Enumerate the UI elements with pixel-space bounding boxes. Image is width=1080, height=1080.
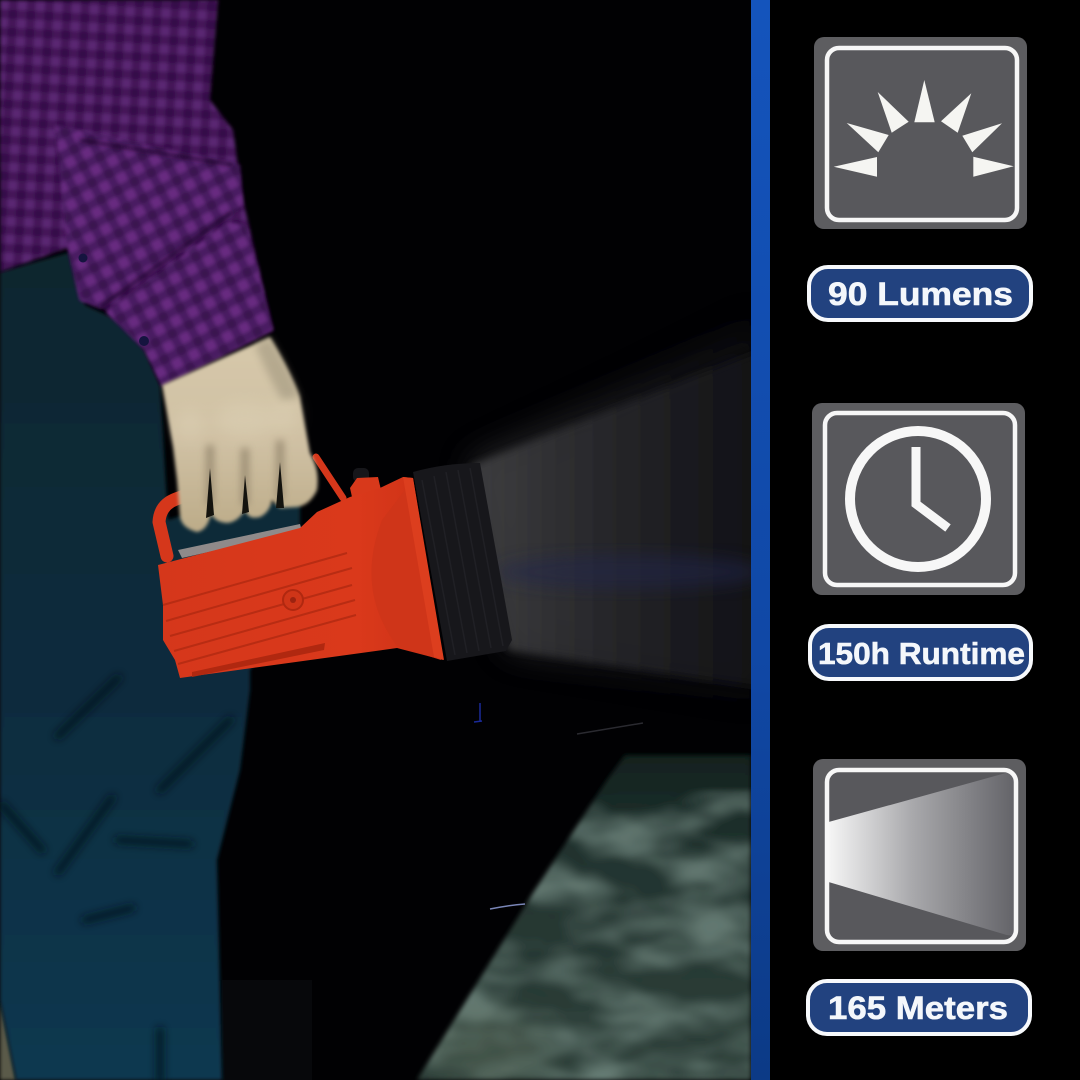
lens ring (413, 463, 512, 661)
stray light streaks (474, 703, 643, 909)
knuckle shading (176, 397, 297, 441)
label: 90 Lumens: 90 Lumens (828, 276, 1013, 312)
label: 150h Runtime: 150h Runtime (818, 636, 1025, 671)
handle inner light strip (178, 524, 302, 558)
switch knob (350, 468, 381, 497)
hand (162, 337, 318, 532)
flange (403, 477, 444, 660)
finger shadows (210, 440, 280, 505)
label: 150h Runtime (810, 626, 1031, 679)
ground: pale corner at bottom left (0, 1000, 16, 1080)
label: 90 Lumens (809, 267, 1031, 320)
icon: beam distance (813, 759, 1026, 951)
icon: clock runtime (812, 403, 1025, 595)
hand shadow at wrist (255, 337, 300, 400)
lower slot (192, 643, 325, 677)
flashlight handle (159, 457, 343, 556)
body dial (283, 590, 303, 610)
shirt folds (80, 140, 233, 307)
icon: brightness sun (814, 37, 1027, 229)
person: trousers (0, 250, 300, 1080)
rolled sleeve (55, 125, 243, 308)
blue divider bar (751, 0, 770, 1080)
flashlight light beam (470, 320, 765, 692)
reflector curve (371, 482, 441, 660)
ground: dim patch beside leg (222, 980, 312, 1080)
ground: pale path at night (400, 750, 760, 1080)
label: 165 Meters: 165 Meters (828, 990, 1008, 1026)
finger gaps (206, 462, 284, 518)
back of hand and fingers (162, 337, 318, 532)
flashlight body (158, 477, 443, 678)
person: plaid shirt (0, 0, 273, 386)
right panel background (770, 0, 1080, 1080)
cuff (106, 222, 273, 386)
label: 165 Meters (808, 981, 1030, 1034)
body ribs (163, 553, 356, 664)
flashlight (158, 457, 512, 678)
background: dark night scene (0, 0, 751, 1080)
shirt buttons (78, 254, 149, 346)
